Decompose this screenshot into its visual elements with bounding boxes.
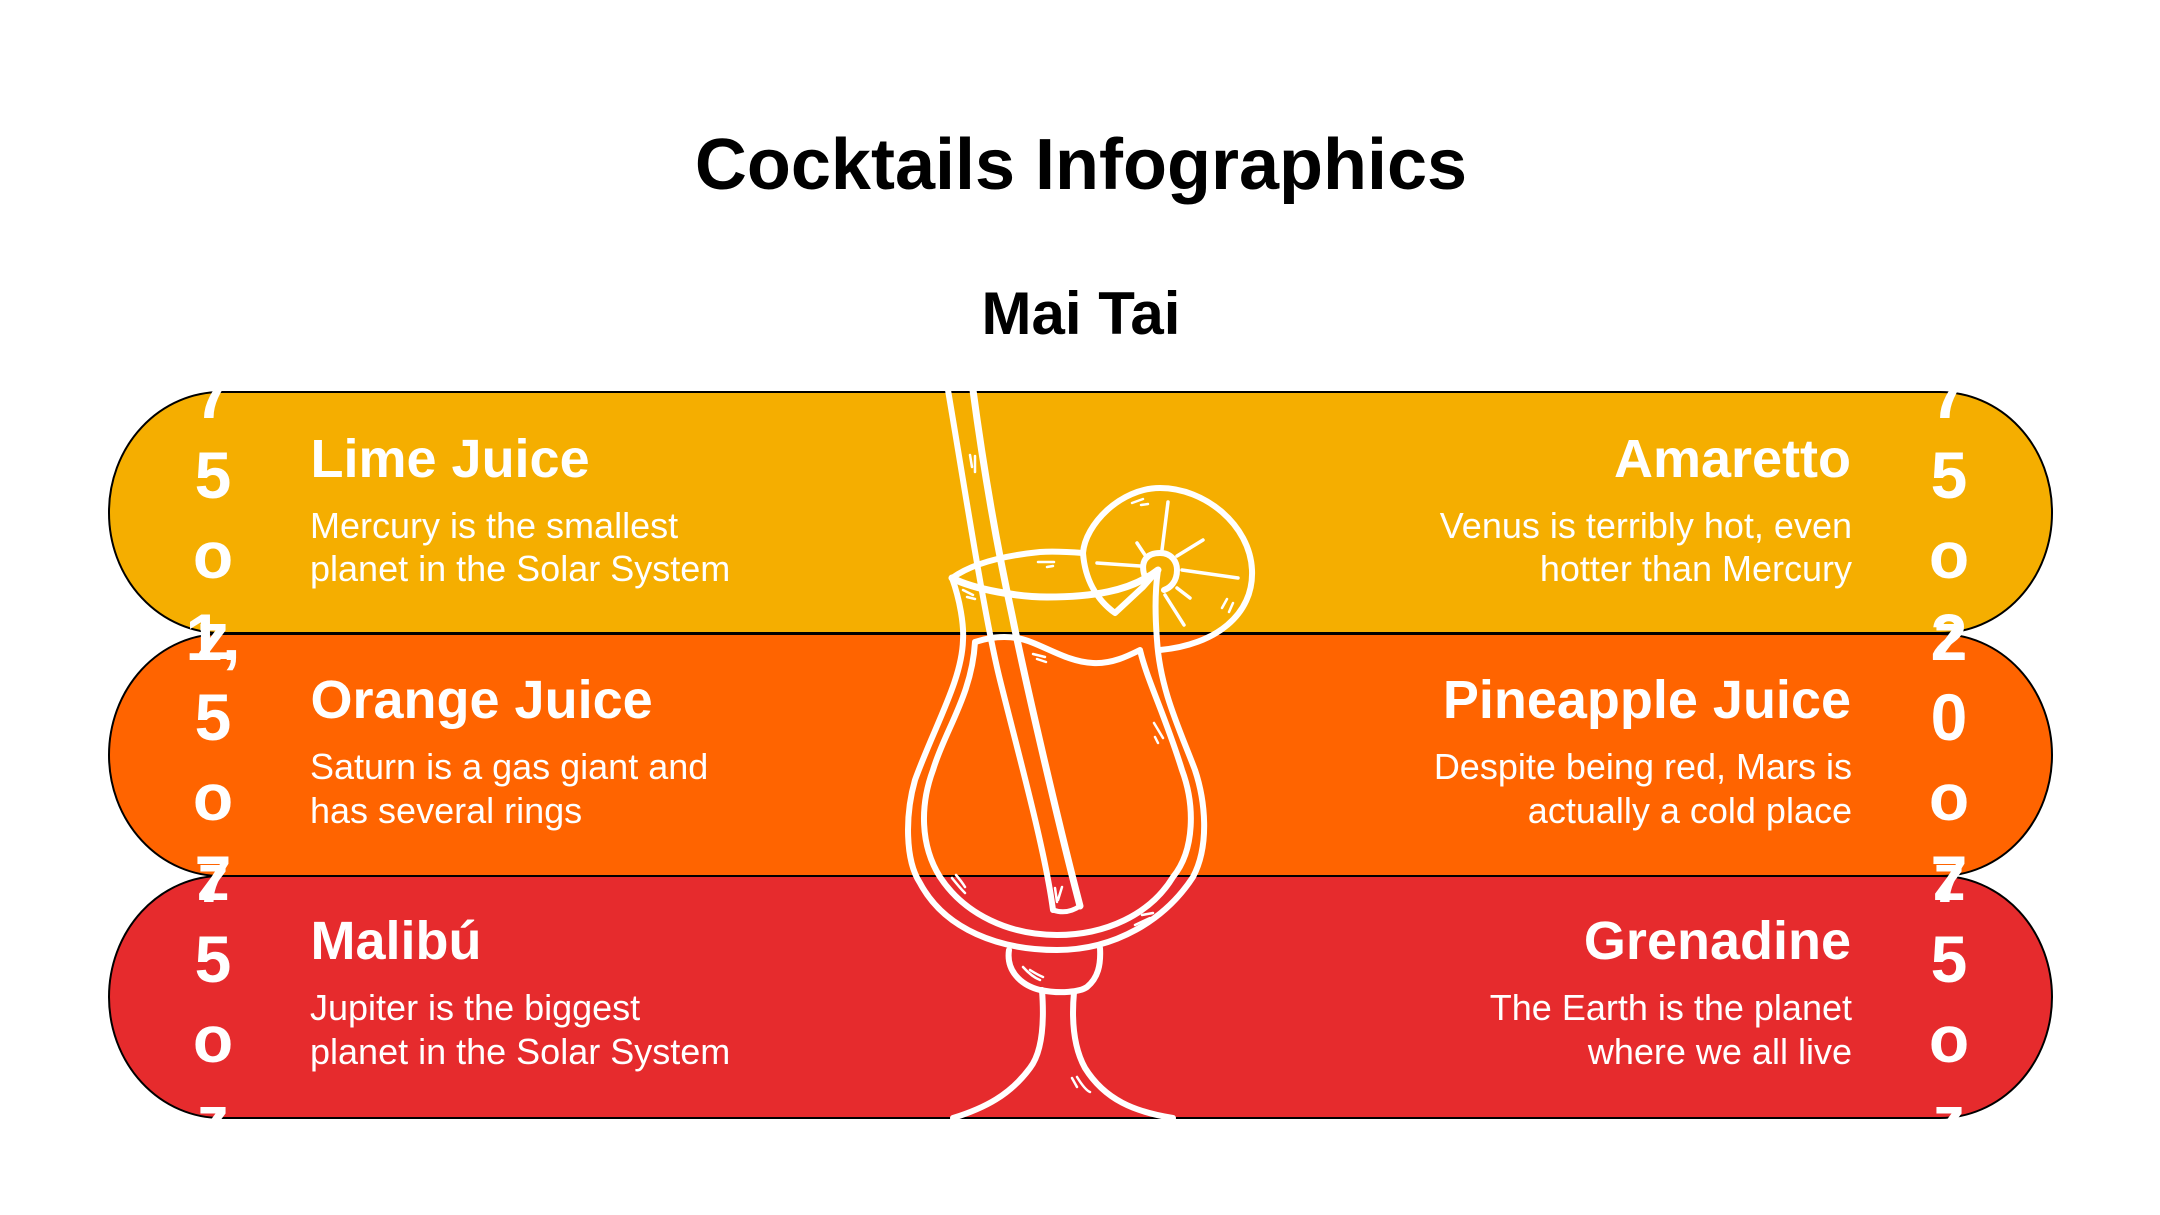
quantity: right 2: 2 <box>1931 600 1967 674</box>
text: Lime Juice: planet in the Solar System <box>310 548 730 589</box>
quantity: left 2: 1, <box>185 600 241 674</box>
quantity: left 2: 5 <box>195 680 231 754</box>
quantity: right 3 <box>1929 842 1969 1156</box>
glass stem <box>953 948 1173 1118</box>
text: Malibú <box>310 911 730 1072</box>
text: Grenadine: where we all live <box>1587 1031 1852 1072</box>
quantity: left 3: 7 <box>195 842 231 916</box>
quantity: right 1 <box>1929 358 1969 673</box>
quantity: left 3: 5 <box>195 922 231 996</box>
quantity: right 2 <box>1929 600 1969 914</box>
quantity: right 2: o <box>1929 760 1969 834</box>
text: Orange Juice: Orange Juice <box>310 670 653 730</box>
text: Malibú: Malibú <box>310 911 482 971</box>
subtitle: Mai Tai <box>982 280 1180 347</box>
straw <box>948 390 1080 912</box>
text: Lime Juice: Mercury is the smallest <box>310 505 678 546</box>
text: Malibú: Jupiter is the biggest <box>310 987 640 1028</box>
text: Pineapple Juice <box>1434 670 1852 831</box>
quantity: left 2 <box>185 600 241 914</box>
quantity: right 3: 7 <box>1931 842 1967 916</box>
text: Orange Juice: has several rings <box>310 790 582 831</box>
glass rim <box>952 552 1158 597</box>
quantity: right 3: o <box>1929 1002 1969 1076</box>
quantity: right 2: z <box>1932 840 1966 914</box>
text: Lime Juice: Lime Juice <box>310 429 590 489</box>
quantity: right 1: o <box>1929 518 1969 592</box>
quantity: left 1 <box>193 358 233 673</box>
lime slice <box>1083 488 1252 650</box>
text: Amaretto: hotter than Mercury <box>1540 548 1852 589</box>
text: Grenadine: The Earth is the planet <box>1490 987 1852 1028</box>
text: Lime Juice <box>310 429 730 589</box>
icon: cocktail glass <box>908 390 1252 1118</box>
quantity: left 2: z <box>196 840 230 914</box>
panel: red band <box>109 876 2052 1118</box>
text: Pineapple Juice: actually a cold place <box>1528 790 1852 831</box>
quantity: left 1: o <box>193 518 233 592</box>
title: Cocktails Infographics <box>695 125 1467 205</box>
quantity: left 1: 5 <box>195 438 231 512</box>
quantity: left 3: o <box>193 1002 233 1076</box>
highlights <box>952 455 1233 1092</box>
quantity: right 1: 7 <box>1931 358 1967 432</box>
text: Pineapple Juice: Pineapple Juice <box>1443 670 1851 730</box>
quantity: left 3: z <box>196 1082 230 1156</box>
text: Amaretto: Amaretto <box>1614 429 1851 489</box>
glass outer wall <box>908 570 1204 950</box>
quantity: right 1: z <box>1932 599 1966 673</box>
quantity: left 2: o <box>193 760 233 834</box>
text: Grenadine <box>1490 911 1852 1072</box>
quantity: right 2: 0 <box>1931 680 1967 754</box>
text: Orange Juice <box>310 670 708 831</box>
glass liquid line <box>924 637 1191 935</box>
text: Malibú: planet in the Solar System <box>310 1031 730 1072</box>
quantity: left 1: z <box>196 599 230 673</box>
text: Grenadine: Grenadine <box>1584 911 1851 971</box>
quantity: right 1: 5 <box>1931 438 1967 512</box>
text: Amaretto: Venus is terribly hot, even <box>1440 505 1852 546</box>
quantity: left 3 <box>193 842 233 1156</box>
text: Orange Juice: Saturn is a gas giant and <box>310 746 708 787</box>
text: Amaretto <box>1440 429 1852 589</box>
panel: orange band <box>109 634 2052 876</box>
quantity: right 3: z <box>1932 1082 1966 1156</box>
panel: yellow band <box>109 392 2052 633</box>
quantity: left 1: 7 <box>195 358 231 432</box>
text: Pineapple Juice: Despite being red, Mars is <box>1434 746 1852 787</box>
quantity: right 3: 5 <box>1931 922 1967 996</box>
